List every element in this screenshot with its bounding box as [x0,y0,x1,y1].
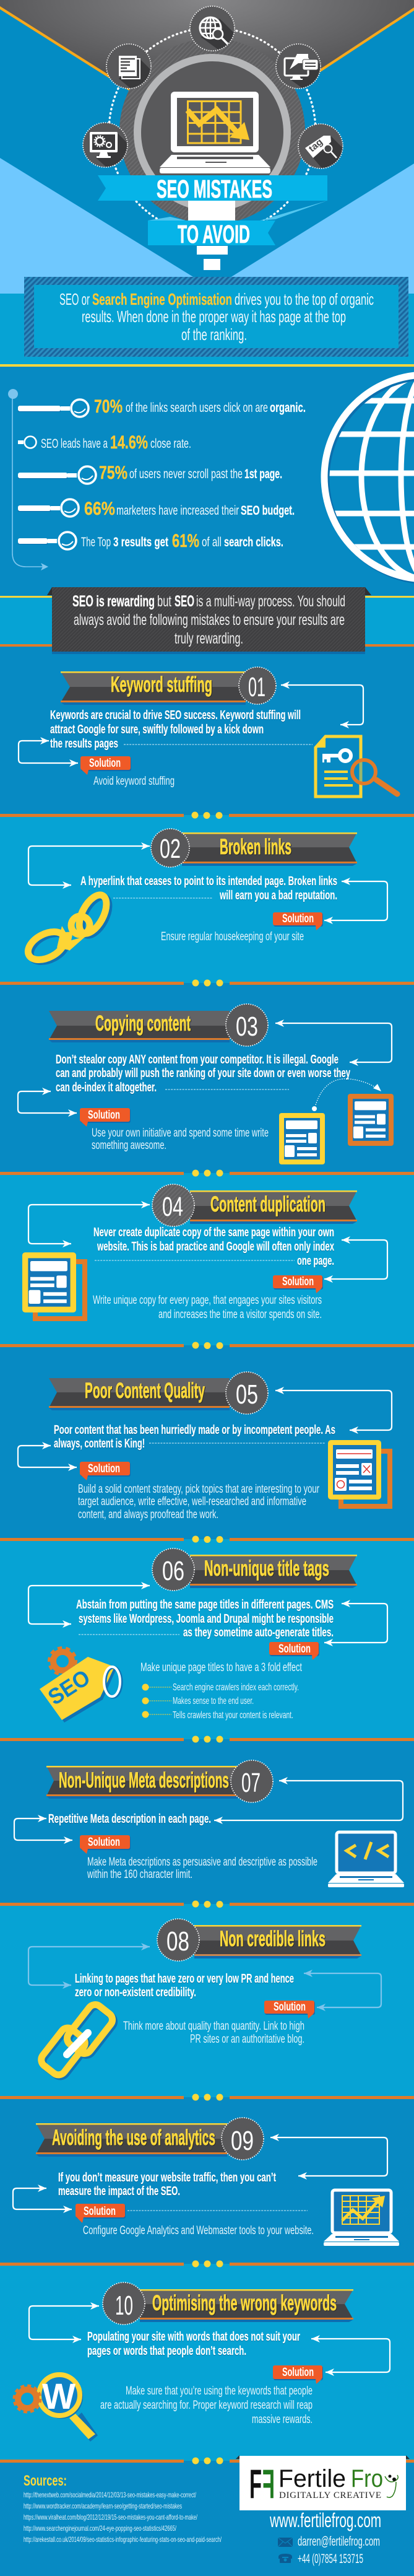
solution text: are actually searching for. Proper keyword research will reap [100,2399,313,2412]
solution badge: Solution [88,1836,120,1849]
panel: logo: Fertile [278,2465,346,2492]
divider [0,980,414,986]
central circle [109,28,316,235]
callout [47,587,371,654]
arrow [304,1973,381,2007]
stat: 66% [18,499,295,519]
solution text [93,1294,322,1321]
icon: keyword magnifier [14,2375,98,2442]
description: pages or words that people don’t search. [87,2344,246,2358]
solution text: PR sites or an authoritative blog. [190,2033,304,2046]
divider [0,2094,414,2101]
description [58,2171,276,2198]
source links: http://thenextweb.com/socialmedia/2014/12/03/13-seo-mistakes-easy-make-correct/ [24,2491,196,2499]
icon: monitor with chat [275,43,321,89]
arrow [275,1391,392,1430]
solution text: Use your own initiative and spend some time write [92,1127,269,1140]
divider [0,1536,414,1543]
title: TO AVOID [178,220,250,248]
heading: 09 [231,2126,254,2156]
icon: SEO tag [40,1648,121,1722]
panel: 01 keyword stuffing [19,667,397,797]
panel: 02 broken links [24,829,387,967]
heading [49,1372,268,1414]
arrow [311,2339,390,2372]
solution text: Ensure regular housekeeping of your site [161,930,304,943]
solution badge [273,912,323,930]
solution badge: Solution [89,757,121,770]
icon: proofread document [328,1440,390,1506]
solution badge [80,1462,131,1480]
solution text: something awesome. [92,1139,166,1152]
solution badge [273,2365,323,2384]
solution badge [269,1642,319,1660]
arrow [13,2188,72,2209]
solution badge [75,2204,308,2223]
solution badge: Solution [88,1462,120,1475]
source links: https://www.viralheat.com/blog/2012/12/19/15-seo-mistakes-you-cant-afford-to-make/ [24,2513,197,2521]
icon: laptop code [328,1832,404,1887]
description: can de-index it altogether. [56,1081,157,1094]
solution badge [273,1275,323,1293]
icon: tag search: tag [307,137,325,154]
arrow [18,1091,77,1113]
heading [151,829,357,867]
panel: 04 content duplication [22,1184,387,1321]
source links: http://www.wordtracker.com/academy/learn-seo/getting-started/seo-mistakes [24,2502,182,2510]
arrow [275,1023,392,1062]
heading: 03 [236,1011,258,1042]
icon: telephone [278,2554,292,2563]
panel: 10 optimising wrong keywords [14,2282,390,2442]
bullet list: Tells crawlers that your content is relevant. [173,1710,293,1721]
description: the results pages [50,737,118,751]
hero backdrop [0,0,414,294]
stat: 75%: 75% [99,463,127,483]
icon: envelope [278,2538,293,2547]
stat: 66%: SEO budget. [241,504,295,518]
stat: 61%: search clicks. [224,535,283,549]
divider [0,1736,414,1743]
icon: duplicate documents [22,1252,85,1319]
phone: +44 (0)7854 153715 [298,2552,363,2566]
panel: 06 non-unique title tags [28,1548,387,1722]
heading: Sources: [24,2473,67,2489]
callout: SEO [175,593,194,610]
heading: Non credible links [220,1927,326,1951]
stat: 14.6%: SEO leads have a [41,437,108,451]
description: If you don’t measure your website traffic, then you can’t [58,2171,276,2185]
solution badge: Solution [282,1275,314,1288]
heading: Non-Unique Meta descriptions [59,1768,229,1792]
source links: http://arekestall.co.uk/2014/09/seo-statistics-infographic-featuring-stats-on-seo-and-paid-search/ [24,2535,222,2544]
heading [157,1919,361,1961]
icon: laptop rising chart [324,2190,399,2246]
solution text: within the 160 character limit. [87,1868,192,1881]
stat: 66%: marketers have increased their [116,504,239,518]
divider [0,811,414,819]
solution text: Think more about quality than quantity. Link to high [123,2020,304,2033]
description: Populating your site with words that does not suit your [87,2330,300,2344]
description [75,1972,294,1999]
icon: key document [316,736,397,797]
icon: laptop with falling chart [160,92,270,173]
description: Linking to pages that have zero or very low PR and hence [75,1972,294,1986]
icon: monitor with gears [82,122,128,168]
solution text: Avoid keyword stuffing [93,775,175,788]
arrow [324,1240,387,1279]
description: measure the impact of the SEO. [58,2185,180,2198]
solution badge: Solution [84,2205,116,2218]
intro text [59,290,374,344]
heading: 08 [166,1926,189,1957]
callout: truly rewarding. [175,630,243,647]
arrow [19,741,78,763]
panel: 03 copying content [18,1004,394,1164]
description: will earn you a bad reputation. [219,889,337,902]
arrow [270,2137,387,2176]
panel: 08 non credible links [28,1919,381,2080]
stat: 75%: 1st page. [244,467,282,481]
panel: sources [24,2473,222,2544]
stat: 61%: of all [202,535,222,549]
intro text: of the ranking. [181,325,247,344]
intro text: Search Engine Optimisation [92,290,232,308]
solution text: massive rewards. [252,2413,313,2426]
source links: http://www.searchenginejournal.com/24-eye-popping-seo-statistics/42665/ [24,2524,176,2533]
stat: 75%: of users never scroll past the [129,467,243,481]
stat: 14.6%: 14.6% [110,432,148,453]
stat: 14.6% [18,432,191,453]
arrow [18,1446,77,1467]
solution badge [80,756,131,775]
title: SEO MISTAKES [157,175,272,203]
intro text: SEO or [59,290,90,308]
heading [36,2118,264,2160]
arrow [28,1586,150,1624]
panel: contact [269,2509,381,2566]
solution text [92,1127,269,1152]
description [54,1423,335,1451]
stat: 14.6%: close rate. [150,437,191,451]
description [56,1053,351,1094]
stat: 61%: 3 results get [113,535,168,549]
heading: Broken links [220,835,291,859]
panel: logo: F [249,2461,262,2507]
bullet list: Makes sense to the end user. [173,1696,254,1706]
description [87,2330,300,2358]
heading: 02 [160,834,181,864]
stat: 61%: 61% [172,531,199,551]
solution badge: Solution [274,2001,306,2014]
arrow [28,846,150,885]
icon: chain link [38,2002,117,2080]
solution text [100,2385,313,2426]
panel: logo: DIGITALLY CREATIVE [279,2491,381,2500]
panel: 07 non-unique meta descriptions [14,1760,404,1887]
panel: statistics [8,375,414,581]
stat: 70%: of the links search users click on are [126,401,268,415]
panel: 09 avoiding analytics [13,2118,399,2246]
panel: logo: Fro [351,2465,383,2492]
arrow [324,1604,387,1643]
description: always, content is King! [54,1437,145,1451]
solution text [87,1856,317,1881]
description [93,1226,334,1268]
description: one page. [297,1254,334,1268]
arrow [29,2306,99,2339]
solution badge: Solution [278,1643,311,1656]
solution text [78,1483,319,1521]
bullet list [142,1682,299,1721]
description [50,709,313,751]
callout: but [157,593,171,610]
solution badge: Solution [282,2366,314,2379]
description: as they sometime auto-generate titles. [183,1626,334,1639]
heading: 10 [115,2290,133,2321]
solution text: target audience, write effective, well-researched and informative [78,1495,306,1508]
heading [61,667,276,705]
heading: Keyword stuffing [111,673,212,697]
panel: logo [236,2455,410,2510]
arrow [28,1947,150,1985]
heading: 05 [236,1379,258,1410]
solution badge: Solution [88,1109,120,1122]
panel: logo: F [262,2461,275,2507]
stat: 61%: The Top [81,535,111,549]
icon: SEO tag: SEO [43,1664,95,1710]
divider [0,1342,414,1349]
heading [49,1004,268,1046]
heading [152,1184,357,1226]
heading [46,1760,273,1802]
arrow [281,685,363,725]
solution badge [80,1835,131,1854]
heading: 06 [162,1556,184,1586]
solution badge [264,2001,315,2019]
heading: 07 [241,1768,261,1798]
arrow [324,881,387,920]
icon: tag search [298,123,343,169]
callout: SEO is rewarding [72,593,155,610]
panel: intro [24,277,408,357]
stat: 66%: 66% [84,499,115,519]
arrow [14,1818,72,1840]
description: attract Google for sure, swiftly followed by a kick down [50,723,264,736]
arrow [28,1205,150,1244]
stat: 70%: organic. [270,401,306,415]
heading: Copying content [95,1011,191,1036]
heading: Avoiding the use of analytics [52,2126,215,2150]
solution badge [80,1108,131,1127]
heading [152,1548,357,1591]
icon: broken chain [24,891,114,967]
stat: 61% [18,531,283,551]
divider [0,1169,414,1177]
divider [0,1900,414,1908]
description [76,1598,334,1639]
heading: Content duplication [210,1192,326,1216]
solution text: Make sure that you’re using the keywords that people [126,2385,313,2398]
icon: keyword magnifier: W [42,2377,75,2417]
solution badge: Solution [282,912,314,925]
heading: 04 [162,1192,183,1222]
description [80,875,337,902]
bullet list: Search engine crawlers index each correctly. [173,1682,299,1693]
stat: 70%: 70% [94,396,123,417]
heading [103,2282,353,2325]
title [98,175,327,270]
icon: globe search [189,6,235,51]
solution text [123,2020,304,2046]
panel: hero [0,0,414,294]
description: Repetitive Meta description in each page. [48,1812,211,1826]
heading: 01 [248,672,265,702]
source links [24,2491,222,2544]
description: zero or non-existent credibility. [75,1986,196,1999]
stat: 70% [18,396,306,417]
panel: 05 poor content quality [18,1372,392,1521]
icon: documents [106,43,152,89]
solution text: content, and always proofread the work. [78,1508,218,1521]
stat: 75% [18,463,282,484]
solution text: and increases the time a visitor spends on site. [158,1308,322,1321]
divider [0,2458,414,2464]
timeline arrow [8,389,48,570]
heading: Non-unique title tags [204,1557,329,1581]
icon: copied documents [279,1079,394,1164]
divider [0,2261,414,2267]
heading: Poor Content Quality [85,1379,205,1403]
solution text: Make unique page titles to have a 3 fold effect [140,1661,302,1674]
arrow [214,1781,403,1820]
icon: globe [309,375,414,581]
